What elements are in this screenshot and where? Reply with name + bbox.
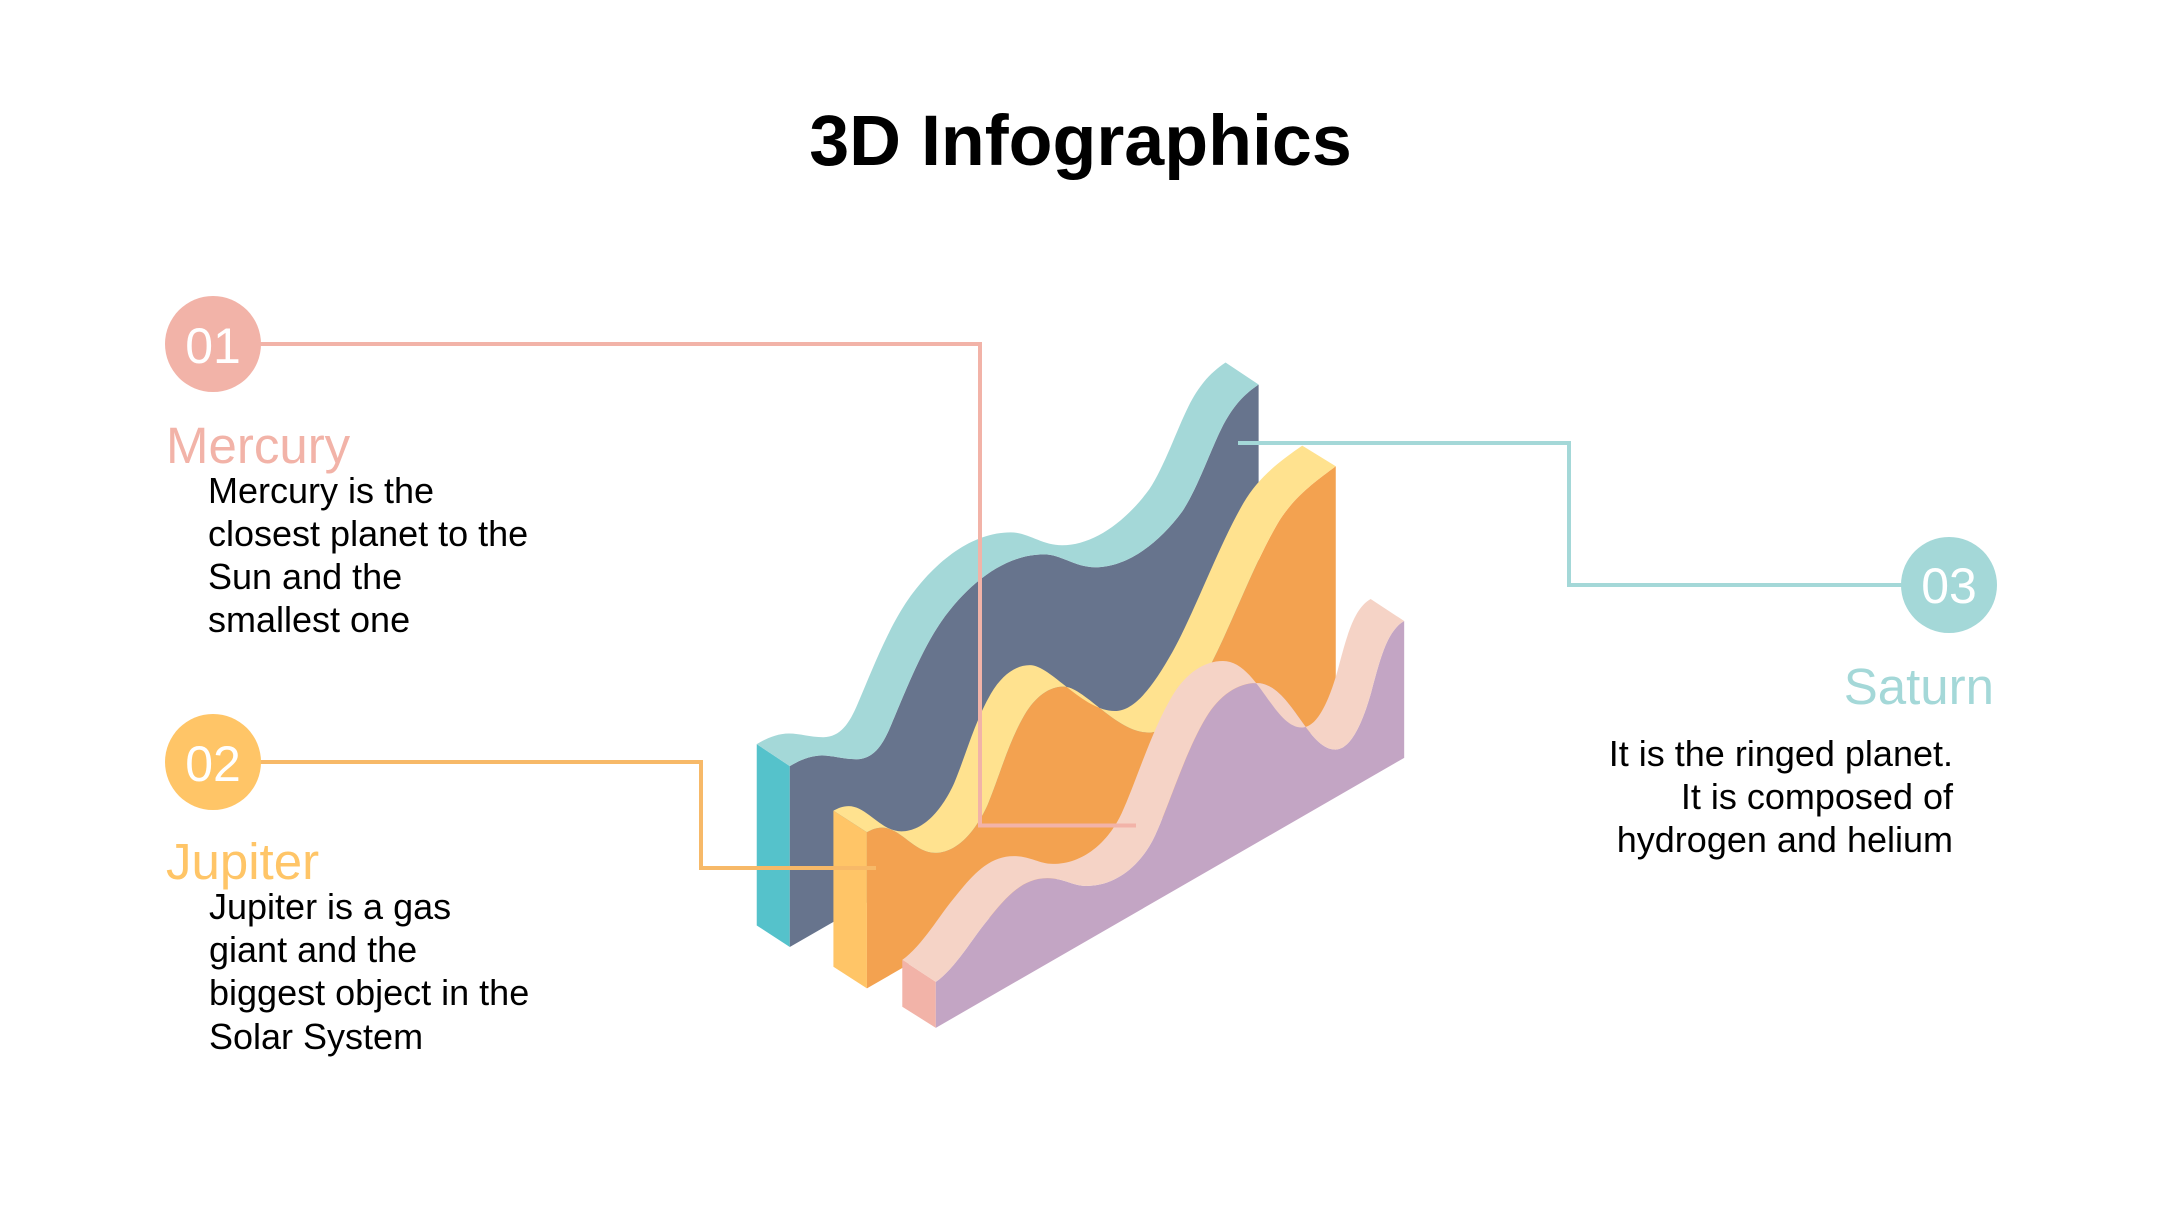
connector: Jupiter (255, 762, 876, 868)
heading: Saturn: Saturn (1844, 658, 1994, 715)
panel: Saturn (1609, 537, 1997, 860)
heading: Jupiter: Jupiter (166, 833, 319, 890)
middle layer: side face (833, 811, 867, 988)
connector: Saturn (1238, 443, 1910, 585)
text: Saturn description: It is composed of (1681, 776, 1954, 817)
front layer: side face (902, 960, 936, 1028)
connector: Mercury (255, 344, 1136, 826)
panel: Jupiter (165, 714, 529, 1057)
text: Jupiter description: giant and the (209, 929, 417, 970)
badge 02: 02 (185, 736, 241, 792)
badge 01 (165, 296, 261, 392)
text: Mercury description: closest planet to the (208, 513, 528, 554)
badge 03: 03 (1921, 558, 1977, 614)
text: Jupiter description: Jupiter is a gas (209, 886, 451, 927)
front layer: top face (902, 599, 1404, 982)
middle layer: front face (867, 466, 1336, 988)
text: Jupiter description: biggest object in the (209, 972, 529, 1013)
badge 01: 01 (185, 318, 241, 374)
back layer: top face (757, 362, 1259, 766)
back layer: side face (757, 744, 790, 947)
text: Saturn description: It is the ringed planet. (1609, 733, 1953, 774)
title: 3D Infographics (809, 101, 1352, 181)
badge 03 (1901, 537, 1997, 633)
text: Mercury description: smallest one (208, 599, 410, 640)
text: Mercury description: Mercury is the (208, 470, 434, 511)
middle layer: top face (833, 446, 1336, 853)
text: Jupiter description: Solar System (209, 1016, 423, 1057)
heading: Mercury: Mercury (166, 417, 351, 474)
back layer: front face (790, 385, 1259, 947)
front layer: front face (936, 621, 1404, 1028)
badge 02 (165, 714, 261, 810)
panel: Mercury (165, 296, 528, 640)
text: Saturn description: hydrogen and helium (1617, 819, 1953, 860)
text: Mercury description: Sun and the (208, 556, 402, 597)
3D wave chart (757, 362, 1404, 1028)
